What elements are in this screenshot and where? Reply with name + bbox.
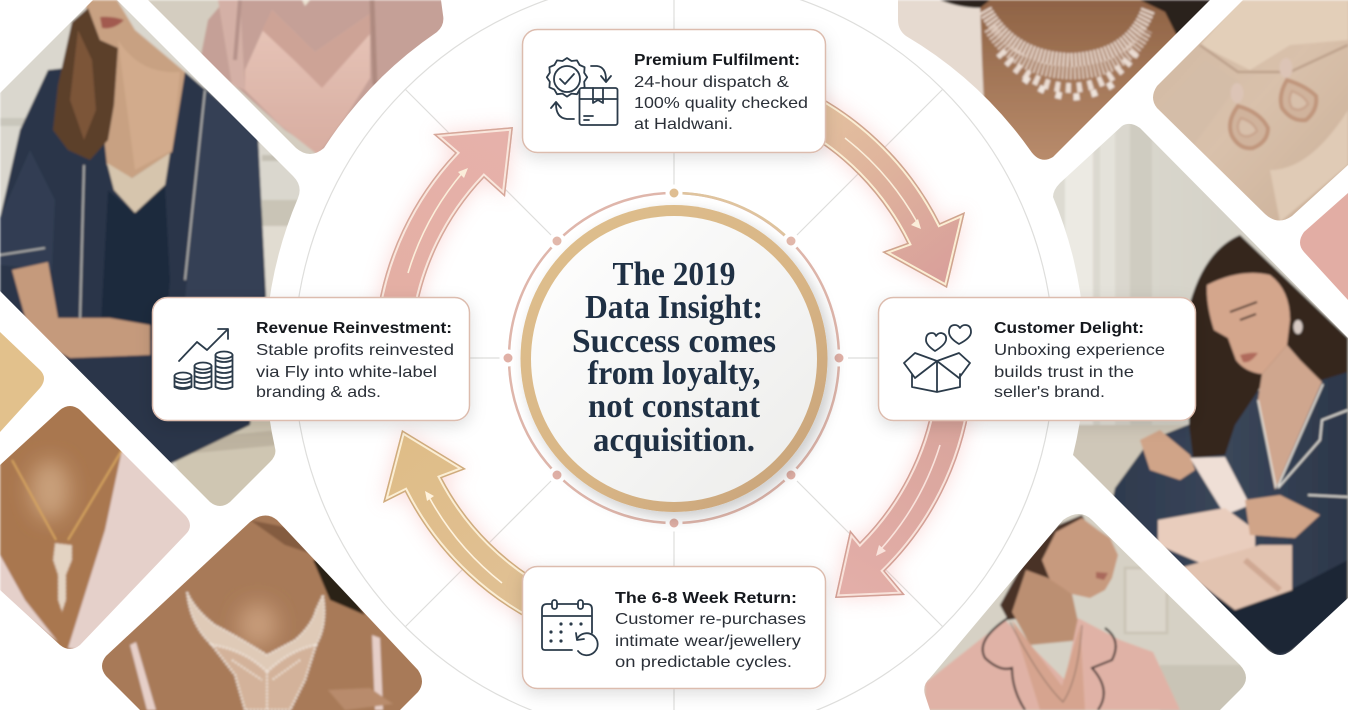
- text: [634, 52, 808, 133]
- photo: woman in profile with pink satin shirt: [920, 505, 1260, 710]
- text: at Haldwani.: [634, 116, 733, 133]
- heading: not constant: [588, 388, 761, 425]
- text: [256, 320, 454, 401]
- icon: open box with hearts: [904, 325, 971, 392]
- photo: diamond collar necklace: [898, 0, 1210, 160]
- text: branding & ads.: [256, 384, 381, 401]
- swatch: gold diamond: [0, 332, 44, 432]
- heading: acquisition.: [593, 422, 755, 459]
- text: Unboxing experience: [994, 342, 1165, 359]
- text: seller's brand.: [994, 384, 1105, 401]
- heading: from loyalty,: [588, 355, 760, 392]
- text: [994, 320, 1165, 401]
- text: intimate wear/jewellery: [615, 633, 801, 650]
- photo: pendant necklace: [0, 406, 190, 649]
- dotted inner ring: [502, 186, 846, 530]
- text: Premium Fulfilment:: [634, 52, 800, 69]
- heading: The 2019: [612, 256, 736, 293]
- photo: woman in navy robe: [0, 0, 310, 520]
- text: Stable profits reinvested: [256, 342, 454, 359]
- arrow: return to reinvestment: [381, 430, 530, 623]
- text: via Fly into white-label: [256, 364, 437, 381]
- heading: Data Insight:: [585, 289, 763, 326]
- text: builds trust in the: [994, 364, 1134, 381]
- icon: calendar with return arrow: [542, 600, 598, 655]
- heading: Success comes: [572, 323, 776, 360]
- card: customer delight: [878, 298, 1196, 420]
- photo: blush satin camisole: [140, 0, 450, 160]
- text: The 6-8 Week Return:: [615, 590, 797, 607]
- outer guide ring and spokes: [294, 0, 1054, 710]
- photo: woman opening gift box: [1040, 110, 1348, 670]
- card: revenue reinvestment: [152, 298, 470, 420]
- card: premium fulfilment: [522, 30, 826, 152]
- photo: lace statement necklace: [102, 516, 422, 710]
- arrow: delight to return: [835, 400, 971, 598]
- icon: badge, parcel and cycle arrows: [547, 58, 618, 125]
- text: 100% quality checked: [634, 95, 808, 112]
- icon: growth arrow and coin stacks: [174, 329, 232, 389]
- heading: [572, 256, 776, 459]
- text: [615, 590, 806, 671]
- text: 24-hour dispatch &: [634, 74, 789, 91]
- text: Customer Delight:: [994, 320, 1144, 337]
- arrow: fulfilment to delight: [820, 93, 968, 289]
- text: Customer re-purchases: [615, 611, 806, 628]
- central disc with heading: [520, 205, 828, 512]
- card: the 6-8 week return: [522, 566, 826, 688]
- swatch: pink diamond: [1300, 193, 1348, 300]
- text: on predictable cycles.: [615, 654, 792, 671]
- arrow: reinvestment to fulfilment: [376, 127, 513, 320]
- text: Revenue Reinvestment:: [256, 320, 452, 337]
- photo: teardrop earrings on satin: [1153, 0, 1348, 220]
